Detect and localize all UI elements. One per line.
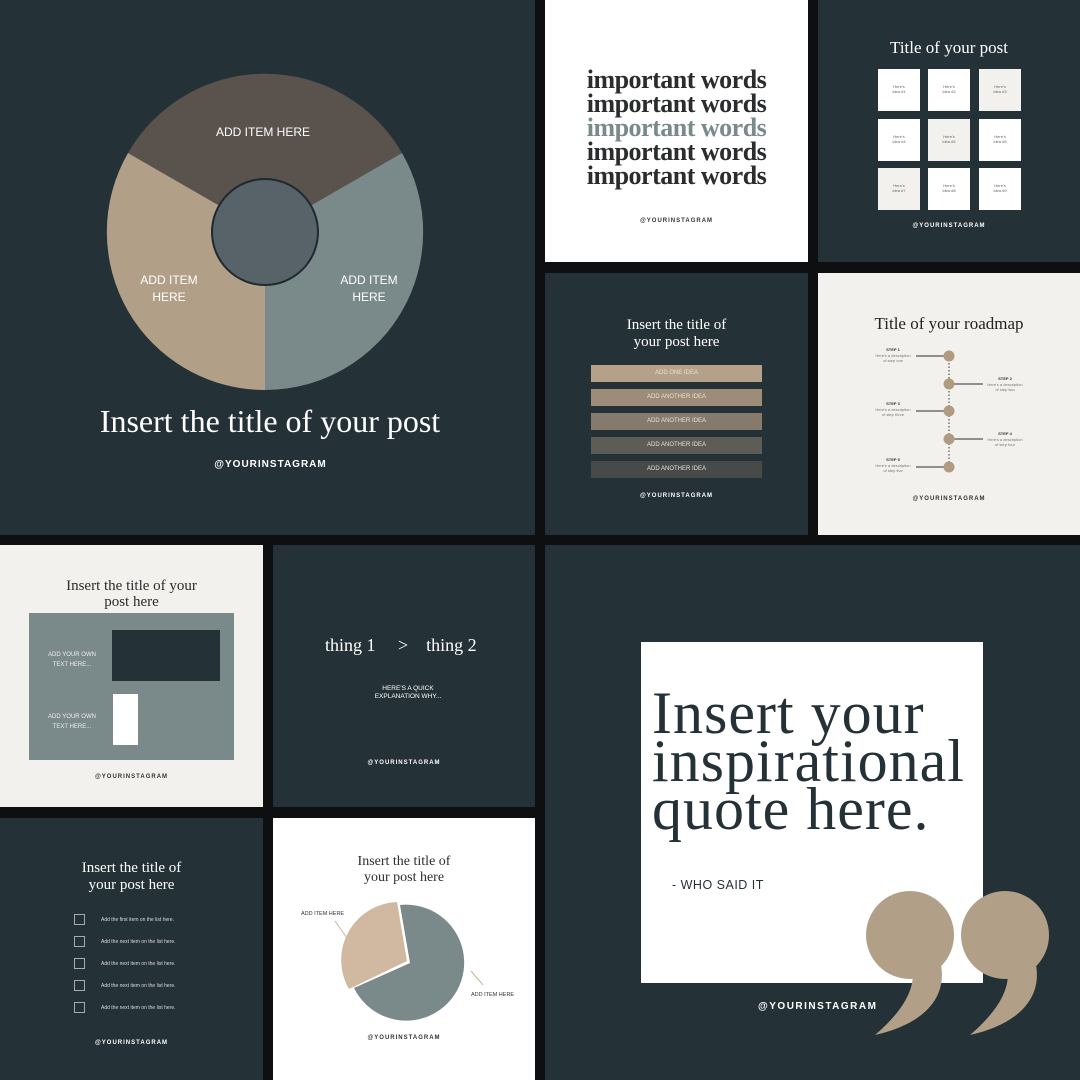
title: Title of your post bbox=[890, 38, 1008, 57]
grid of ideas: Here's bbox=[994, 84, 1006, 89]
pie chart: HERE bbox=[152, 290, 186, 304]
grid of ideas: Here's bbox=[943, 84, 955, 89]
timeline: Here's a description bbox=[875, 463, 911, 468]
bars: ADD ANOTHER IDEA bbox=[647, 418, 706, 424]
grid of ideas: Here's bbox=[994, 134, 1006, 139]
grid of ideas: idea #7 bbox=[892, 188, 906, 193]
timeline: STEP 4 bbox=[998, 431, 1013, 436]
quote card bbox=[641, 642, 983, 983]
timeline: Here's a description bbox=[987, 437, 1023, 442]
grid of ideas: Here's bbox=[893, 84, 905, 89]
timeline: of step three bbox=[882, 412, 905, 417]
grid of ideas: idea #4 bbox=[892, 139, 906, 144]
title: Insert the title of your bbox=[66, 578, 197, 594]
explanation: HERE'S A QUICK bbox=[382, 685, 434, 692]
panel: thing 1 > thing 2 bbox=[273, 545, 535, 807]
timeline: Here's a description bbox=[987, 382, 1023, 387]
icon: quote marks bbox=[866, 891, 1049, 1035]
handle: @YOURINSTAGRAM bbox=[95, 1040, 168, 1046]
panel: pie chart post bbox=[0, 0, 535, 535]
repeated words: important words bbox=[587, 89, 766, 118]
repeated words: important words bbox=[587, 65, 766, 94]
bars: ADD ANOTHER IDEA bbox=[647, 442, 706, 448]
timeline: Here's a description bbox=[875, 353, 911, 358]
list: Add the next item on the list here. bbox=[101, 1005, 176, 1011]
handle: @YOURINSTAGRAM bbox=[367, 1035, 441, 1041]
grid of ideas: Here's bbox=[943, 134, 955, 139]
list: Add the first item on the list here. bbox=[101, 917, 174, 923]
list: Add the next item on the list here. bbox=[101, 983, 176, 989]
panel: inspirational quote bbox=[545, 545, 1080, 1080]
grid of ideas: Here's bbox=[893, 183, 905, 188]
grid of ideas: idea #6 bbox=[993, 139, 1007, 144]
grid of ideas: idea #1 bbox=[892, 89, 906, 94]
grid of ideas: Here's bbox=[943, 183, 955, 188]
pie chart: ADD ITEM HERE bbox=[471, 992, 514, 998]
grid of ideas: idea #3 bbox=[993, 89, 1007, 94]
pie chart: HERE bbox=[352, 290, 386, 304]
comparison heading: thing 1 > thing 2 bbox=[325, 635, 477, 655]
grid of ideas: Here's bbox=[994, 183, 1006, 188]
title: Insert the title of bbox=[627, 317, 726, 333]
title bbox=[358, 854, 450, 885]
timeline: STEP 1 bbox=[886, 347, 901, 352]
grid of ideas: idea #8 bbox=[942, 188, 956, 193]
quote text: Insert your bbox=[652, 680, 925, 746]
pie chart: ADD ITEM bbox=[140, 273, 198, 287]
panel: idea bars bbox=[545, 273, 808, 535]
title: Insert the title of your post bbox=[100, 403, 440, 439]
pie chart bbox=[301, 902, 514, 1021]
repeated words: important words bbox=[587, 161, 766, 190]
bars bbox=[591, 365, 762, 478]
content box: ADD YOUR OWN bbox=[48, 652, 96, 658]
list: Add the next item on the list here. bbox=[101, 939, 176, 945]
content box: ADD YOUR OWN bbox=[48, 714, 96, 720]
content box: TEXT HERE... bbox=[53, 724, 91, 730]
panel: checklist bbox=[0, 818, 263, 1080]
timeline bbox=[875, 347, 1023, 473]
timeline: STEP 3 bbox=[886, 401, 901, 406]
quote text: inspirational bbox=[652, 728, 965, 794]
list: Add the next item on the list here. bbox=[101, 961, 176, 967]
pie chart: ADD ITEM bbox=[340, 273, 398, 287]
title: your post here bbox=[634, 334, 719, 350]
handle: @YOURINSTAGRAM bbox=[640, 218, 713, 224]
quote text bbox=[652, 680, 965, 842]
content box: TEXT HERE... bbox=[53, 662, 91, 668]
quote text: quote here. bbox=[652, 776, 930, 842]
timeline: of step two bbox=[995, 387, 1015, 392]
title bbox=[82, 860, 182, 893]
panel: text with images bbox=[0, 545, 263, 807]
title: Insert the title of bbox=[82, 860, 181, 876]
handle: @YOURINSTAGRAM bbox=[95, 774, 168, 780]
handle: @YOURINSTAGRAM bbox=[912, 496, 986, 502]
handle: @YOURINSTAGRAM bbox=[912, 223, 986, 229]
panel: idea grid bbox=[818, 0, 1080, 262]
grid of ideas: idea #9 bbox=[993, 188, 1007, 193]
grid of ideas: idea #5 bbox=[942, 139, 956, 144]
explanation bbox=[375, 685, 441, 700]
timeline: of step one bbox=[883, 358, 904, 363]
grid of ideas bbox=[878, 69, 1021, 210]
pie chart: ADD ITEM HERE bbox=[216, 125, 310, 139]
timeline: STEP 2 bbox=[998, 376, 1013, 381]
list bbox=[74, 914, 176, 1013]
title: your post here bbox=[364, 870, 444, 885]
panel: important words bbox=[545, 0, 808, 262]
handle: @YOURINSTAGRAM bbox=[640, 493, 713, 499]
timeline: Here's a description bbox=[875, 407, 911, 412]
title bbox=[627, 317, 726, 350]
panel: roadmap bbox=[818, 273, 1080, 535]
repeated words: important words bbox=[587, 137, 766, 166]
handle: @YOURINSTAGRAM bbox=[214, 459, 327, 470]
timeline: STEP 5 bbox=[886, 457, 901, 462]
title: Title of your roadmap bbox=[874, 314, 1024, 333]
pie chart bbox=[106, 74, 424, 390]
repeated words: important words bbox=[587, 113, 766, 142]
timeline: of step four bbox=[995, 442, 1016, 447]
panel: small pie chart bbox=[273, 818, 535, 1080]
grid of ideas: Here's bbox=[893, 134, 905, 139]
attribution: - WHO SAID IT bbox=[672, 878, 764, 892]
bars: ADD ANOTHER IDEA bbox=[647, 394, 706, 400]
title: post here bbox=[104, 594, 159, 610]
explanation: EXPLANATION WHY... bbox=[375, 693, 441, 700]
pie chart: ADD ITEM HERE bbox=[301, 911, 344, 917]
content box bbox=[29, 613, 234, 760]
title: Insert the title of bbox=[358, 854, 450, 869]
title: your post here bbox=[89, 877, 174, 893]
bars: ADD ANOTHER IDEA bbox=[647, 466, 706, 472]
repeated words bbox=[587, 65, 766, 190]
grid of ideas: idea #2 bbox=[942, 89, 956, 94]
handle: @YOURINSTAGRAM bbox=[758, 1001, 877, 1012]
timeline: of step five bbox=[883, 468, 903, 473]
bars: ADD ONE IDEA bbox=[655, 370, 698, 376]
title bbox=[66, 578, 197, 610]
handle: @YOURINSTAGRAM bbox=[367, 760, 441, 766]
